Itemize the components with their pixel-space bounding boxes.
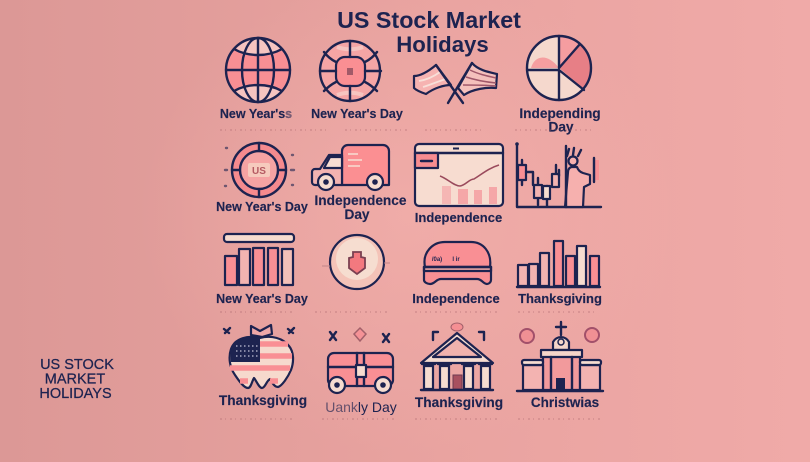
icon: delivery truck [312, 145, 389, 190]
label: Uankly Day [325, 399, 397, 415]
label: Independence [415, 210, 502, 225]
label: Christwias [531, 395, 599, 410]
icon: bank temple [421, 323, 493, 390]
icon: bar chart panel [224, 234, 294, 285]
label: New Year'ss [220, 107, 292, 121]
icon: crossed flags [414, 63, 497, 103]
micro text rows [220, 130, 600, 419]
icon: burger dome: /0a) [432, 257, 442, 263]
label: Independence [314, 193, 407, 208]
icon: candlestick chart with statue [515, 142, 601, 207]
label: New Year's Day [216, 292, 308, 306]
label: Day [344, 207, 370, 222]
icon: treasure cart [328, 328, 393, 393]
label: Day [548, 120, 574, 134]
icon: bar chart [517, 241, 600, 287]
title: US Stock Market [337, 7, 521, 33]
icon: globe [226, 37, 290, 103]
icon: church [517, 322, 603, 391]
side caption: HOLIDAYS [39, 386, 112, 402]
icon: burger dome: l ir [452, 257, 460, 263]
label: Thanksgiving [518, 291, 602, 306]
side caption: MARKET [45, 372, 105, 388]
icon: shield badge [322, 235, 390, 289]
icon: pie chart [527, 36, 591, 100]
icon: target coin: US [252, 166, 266, 177]
label: New Year's Day [311, 107, 403, 121]
label: Thanksgiving [219, 393, 307, 408]
icon: dashboard window [415, 144, 503, 206]
side caption: US STOCK [40, 357, 114, 373]
title: Holidays [396, 32, 489, 57]
label: New Year's Day [216, 200, 308, 214]
icon: target coin [225, 143, 294, 197]
icon: burger dome [424, 242, 491, 284]
icon: round seal [320, 41, 381, 101]
label: Thanksgiving [415, 395, 503, 410]
label: Independing [519, 106, 601, 121]
icon: flag apple [224, 325, 294, 388]
label: Independence [412, 291, 500, 306]
